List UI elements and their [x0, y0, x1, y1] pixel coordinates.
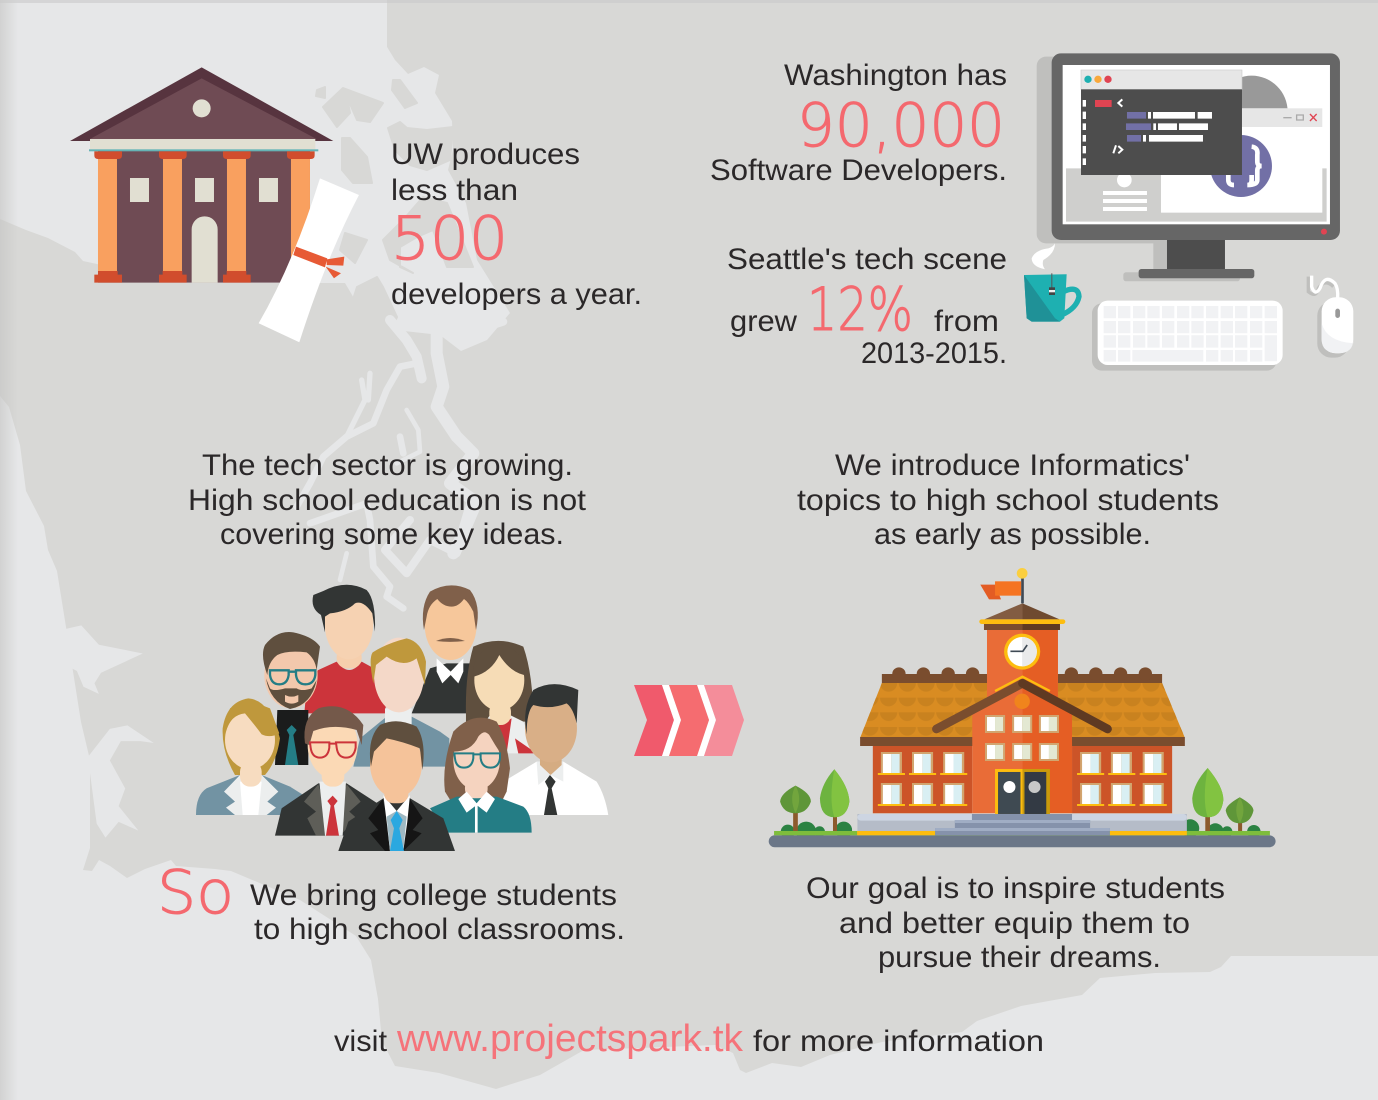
illustration: high school building [769, 568, 1276, 847]
person: dark hair man white shirt [503, 684, 608, 815]
text: so we bring college students: So [157, 858, 234, 928]
person: moustache dark sweater [412, 585, 478, 713]
illustration: group of students [196, 585, 608, 851]
text: UW produces less than 500 developers a year: UW produces [391, 138, 580, 171]
text: our goal: pursue their dreams. [878, 941, 1161, 974]
wing windows [878, 752, 1167, 806]
text: our goal: and better equip them to [839, 907, 1190, 940]
icon: keyboard [1092, 301, 1283, 371]
entrance steps [935, 814, 1110, 835]
text: Seattle tech scene grew 12 percent: 2013-2015. [861, 337, 1007, 370]
text: Seattle tech scene grew 12 percent [727, 243, 1007, 370]
trees and bushes [780, 768, 1261, 842]
person: dark hair red shirt [304, 585, 387, 713]
text: our goal [806, 872, 1225, 974]
text: Seattle tech scene grew 12 percent: grew [730, 305, 797, 338]
text: we introduce informatics topics: as early as possible. [874, 518, 1151, 551]
icon: university building with diploma [70, 67, 359, 342]
text: Washington has 90,000 software developers [710, 59, 1007, 187]
icon: computer mouse [1308, 276, 1353, 358]
icon: diploma scroll [259, 178, 359, 342]
text: footer call to action: visit [334, 1025, 388, 1058]
person: man blue tie front [338, 721, 455, 851]
text: the tech sector is growing: The tech sector is growing. [202, 449, 573, 482]
text: Washington has 90,000 software developers: 90,000 [797, 91, 1005, 161]
text: so we bring college students: to high school classrooms. [254, 913, 625, 946]
text: we introduce informatics topics [797, 449, 1219, 551]
text: the tech sector is growing [188, 449, 587, 551]
text: UW produces less than 500 developers a year [391, 138, 642, 311]
arrow: pink chevrons [634, 685, 744, 756]
clock tower [979, 568, 1065, 702]
text: footer call to action: www.projectspark.tk [396, 1018, 744, 1060]
text: the tech sector is growing: covering some key ideas. [220, 518, 564, 551]
person: woman teal top glasses [430, 718, 532, 833]
text: Seattle tech scene grew 12 percent: from [934, 305, 999, 338]
monitor body [1052, 53, 1340, 240]
text: Seattle tech scene grew 12 percent: Seattle's tech scene [727, 243, 1007, 276]
person: man red glasses dark suit [275, 706, 387, 836]
person: blond man blue jacket [353, 638, 449, 767]
text: our goal: Our goal is to inspire students [806, 872, 1225, 905]
text: footer call to action: for more information [753, 1025, 1044, 1058]
text: so we bring college students [157, 858, 625, 946]
text: we introduce informatics topics: topics to high school students [797, 484, 1219, 517]
roof [860, 667, 1185, 746]
text: so we bring college students: We bring college students [250, 879, 617, 912]
text: we introduce informatics topics: We introduce Informatics' [835, 449, 1190, 482]
text: UW produces less than 500 developers a year: 500 [391, 204, 508, 274]
text: Seattle tech scene grew 12 percent: 12% [807, 275, 913, 345]
person: bearded man glasses [263, 632, 320, 765]
monitor stand [1139, 240, 1254, 278]
text: footer call to action [334, 1018, 1044, 1060]
text: UW produces less than 500 developers a year: less than [391, 174, 518, 207]
icon: teal coffee mug with steam [1024, 243, 1079, 322]
text: Washington has 90,000 software developers: Washington has [784, 59, 1007, 92]
person: blonde woman grey jacket [196, 698, 303, 815]
text: Washington has 90,000 software developers: Software Developers. [710, 154, 1007, 187]
text: UW produces less than 500 developers a year: developers a year. [391, 278, 642, 311]
text: the tech sector is growing: High school education is not [188, 484, 587, 517]
person: woman long dark hair [448, 641, 537, 753]
icon: desktop computer [1024, 53, 1353, 371]
central entrance block [936, 677, 1108, 814]
